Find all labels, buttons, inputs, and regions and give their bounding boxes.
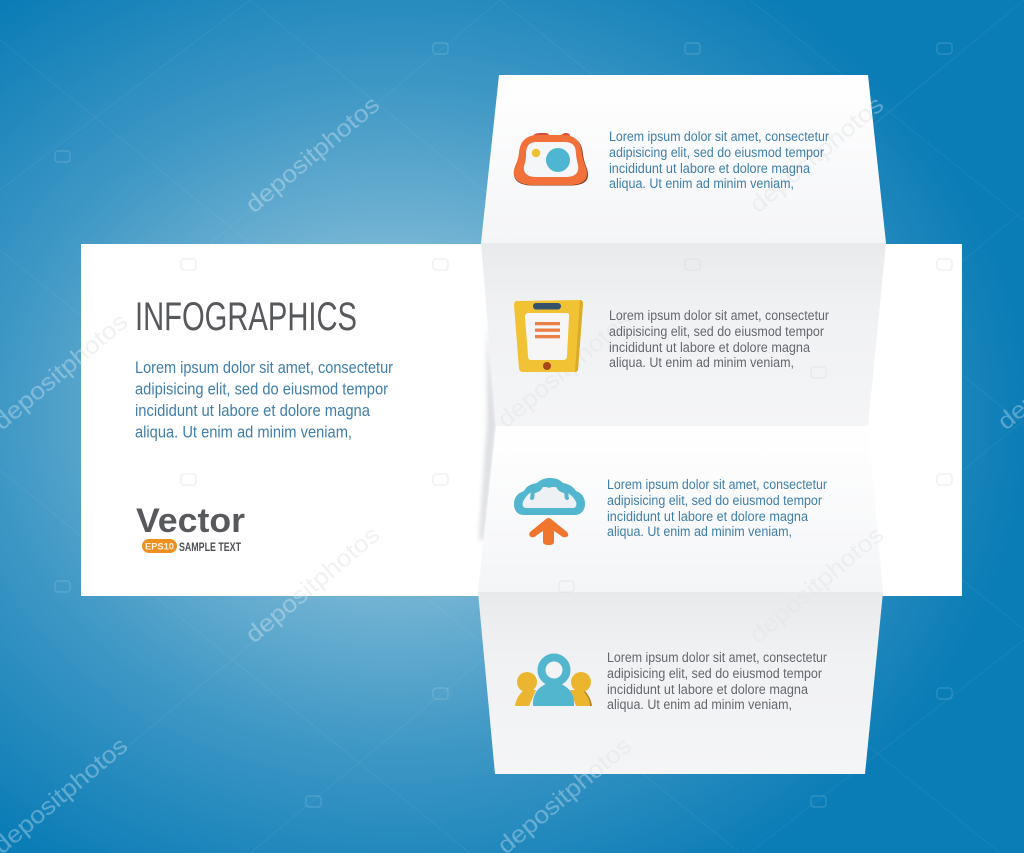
icon: people xyxy=(515,658,592,706)
text block: item 1: aliqua. Ut enim ad minim veniam, xyxy=(609,176,794,191)
text block: item 3: incididunt ut labore et dolore magna xyxy=(607,509,809,524)
text block: item 3 xyxy=(607,477,827,539)
text block: item 3: adipisicing elit, sed do eiusmod tempor xyxy=(607,493,822,508)
watermark camera marks xyxy=(55,43,952,807)
text block: item 3: Lorem ipsum dolor sit amet, consectetur xyxy=(607,477,827,492)
fold 1 xyxy=(481,75,886,243)
text block: intro: aliqua. Ut enim ad minim veniam, xyxy=(135,422,352,442)
text block: intro: incididunt ut labore et dolore magna xyxy=(135,401,370,420)
watermarks on paper xyxy=(81,103,883,774)
logo: vector sample text xyxy=(136,502,245,554)
text block: item 2: Lorem ipsum dolor sit amet, consectetur xyxy=(609,308,829,323)
watermarks on paper: depositphotos xyxy=(241,521,385,649)
fold 3 xyxy=(478,426,883,592)
text block: item 1: adipisicing elit, sed do eiusmod tempor xyxy=(609,145,824,160)
text block: intro: adipisicing elit, sed do eiusmod tempor xyxy=(135,380,388,398)
logo: vector sample text: EPS10 xyxy=(145,542,174,552)
text block: item 1: incididunt ut labore et dolore magna xyxy=(609,161,811,176)
text block: item 3: aliqua. Ut enim ad minim veniam, xyxy=(607,524,792,539)
watermarks: depositphotos xyxy=(745,91,889,219)
title: INFOGRAPHICS xyxy=(135,295,357,339)
panel: folded sheet xyxy=(478,75,886,774)
watermarks: depositphotos xyxy=(241,91,385,219)
text block: item 4: aliqua. Ut enim ad minim veniam, xyxy=(607,697,792,712)
text block: item 2: adipisicing elit, sed do eiusmod tempor xyxy=(609,324,824,339)
text block: intro: Lorem ipsum dolor sit amet, consectetur xyxy=(135,358,393,377)
watermarks: depositphotos xyxy=(241,521,385,649)
text block: item 4 xyxy=(607,650,827,712)
icon: tablet xyxy=(514,300,583,372)
logo: vector sample text: Vector xyxy=(136,502,245,540)
watermarks on paper: depositphotos xyxy=(493,306,637,434)
watermarks on paper: depositphotos xyxy=(745,521,889,649)
fold 2 xyxy=(481,243,886,426)
watermarks: depositphotos xyxy=(745,521,889,649)
watermarks on paper: depositphotos xyxy=(745,91,889,219)
text block: item 4: adipisicing elit, sed do eiusmod tempor xyxy=(607,666,822,681)
text block: item 2: aliqua. Ut enim ad minim veniam, xyxy=(609,355,794,370)
fold 4 xyxy=(478,592,883,774)
text block: item 2 xyxy=(609,308,829,370)
panel: white horizontal band xyxy=(81,244,962,596)
text block: item 1 xyxy=(609,129,829,191)
shadow: sheet fold left xyxy=(479,320,496,540)
text block: item 2: incididunt ut labore et dolore magna xyxy=(609,340,811,355)
text block: intro xyxy=(135,358,393,442)
text block: item 1: Lorem ipsum dolor sit amet, consectetur xyxy=(609,129,829,144)
text block: item 4: Lorem ipsum dolor sit amet, consectetur xyxy=(607,650,827,665)
icon: cloud upload xyxy=(514,478,585,545)
logo: vector sample text: SAMPLE TEXT xyxy=(179,540,241,554)
icon: camera xyxy=(514,133,588,186)
text block: item 4: incididunt ut labore et dolore magna xyxy=(607,682,809,697)
